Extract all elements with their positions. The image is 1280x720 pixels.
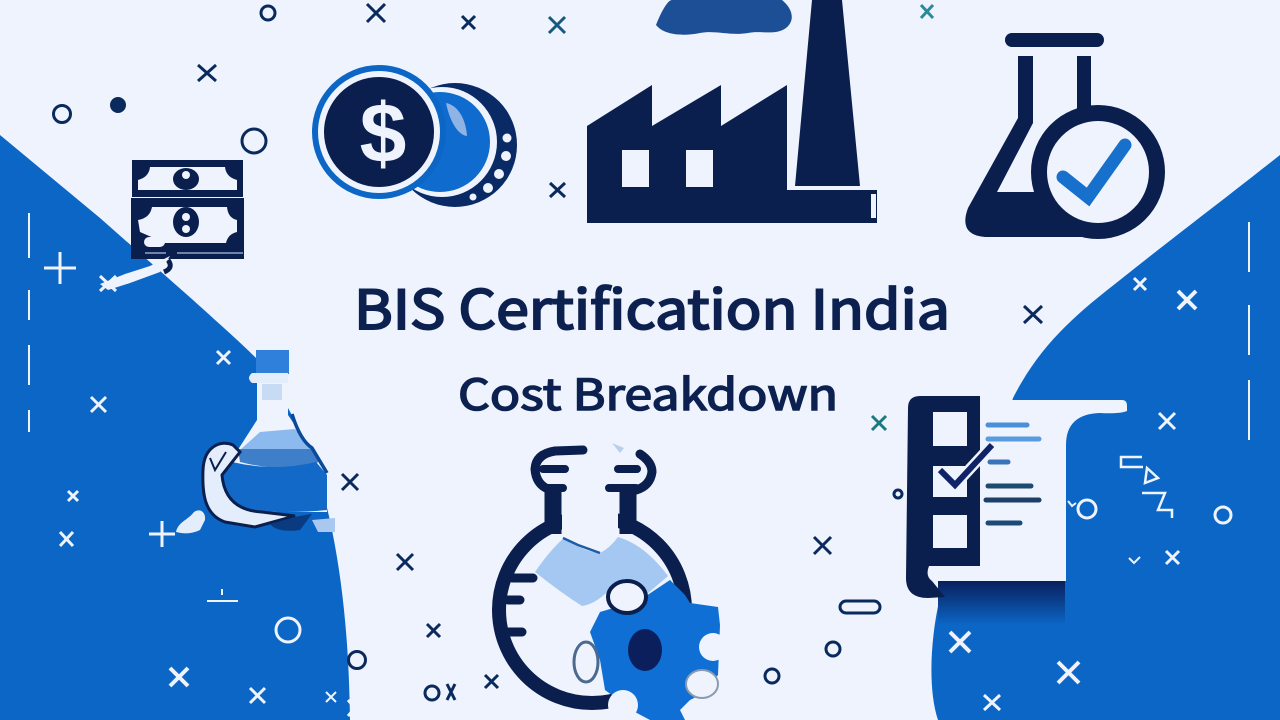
icon: checklist document	[906, 396, 1127, 625]
filled dot	[110, 97, 126, 113]
decorative marks: light background	[54, 4, 1042, 700]
icon: smoke cloud	[656, 0, 792, 35]
icon: blue liquid bottle	[176, 350, 335, 533]
decorative marks: on blue	[29, 213, 1249, 716]
subtitle: Cost Breakdown	[458, 361, 838, 423]
icon: round flask with gear	[499, 443, 727, 720]
icon: dollar coins	[312, 65, 517, 207]
icon: flask with check	[965, 33, 1165, 239]
left blue wave panel	[0, 135, 350, 720]
right blue wave panel	[931, 155, 1280, 720]
icon: dollar coins: $	[360, 86, 406, 180]
icon: banknotes	[100, 160, 244, 290]
title: BIS Certification India	[354, 266, 950, 345]
icon: factory	[587, 0, 877, 223]
